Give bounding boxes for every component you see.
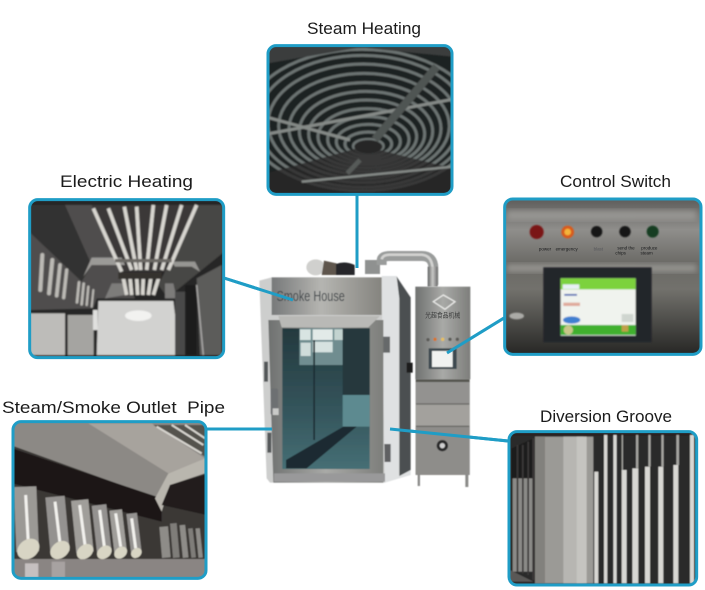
panel: electric heating photo (29, 199, 224, 358)
top fittings and exhaust pipe (306, 255, 438, 287)
cabinet side wall (382, 276, 411, 483)
panel: steam heating photo (266, 44, 454, 196)
door frame (268, 320, 383, 483)
panel labels: power (539, 246, 552, 251)
smoke house sign: Smoke House (276, 289, 345, 305)
panel: steam/smoke outlet pipe photo (12, 421, 207, 579)
glass window (282, 328, 370, 469)
control cabinet (415, 287, 470, 487)
panel: control switch photo (504, 198, 702, 355)
door handles (264, 362, 279, 453)
cabinet front with sign (259, 277, 385, 483)
leader lines (207, 195, 508, 441)
panel labels: chips (615, 251, 627, 256)
heading: Steam/Smoke Outlet Pipe: Steam/Smoke Outlet Pipe (2, 398, 225, 417)
heading: Diversion Groove: Diversion Groove (540, 407, 672, 426)
panel labels: emergency (556, 246, 579, 251)
heading: Control Switch: Control Switch (560, 172, 671, 191)
panel labels: send the (617, 245, 635, 250)
panel labels: blast (594, 246, 604, 251)
heading: Steam Heating: Steam Heating (307, 19, 421, 38)
panel labels: produce (641, 245, 658, 250)
panel labels (539, 245, 658, 256)
heading: Electric Heating: Electric Heating (60, 172, 193, 191)
panel: diversion groove photo (508, 431, 697, 586)
machine: smoke house (259, 255, 470, 487)
panel labels: steam (641, 251, 653, 256)
cabinet brand text: 光超食品机械 (425, 310, 460, 319)
leader line tips over machine (224, 240, 508, 441)
